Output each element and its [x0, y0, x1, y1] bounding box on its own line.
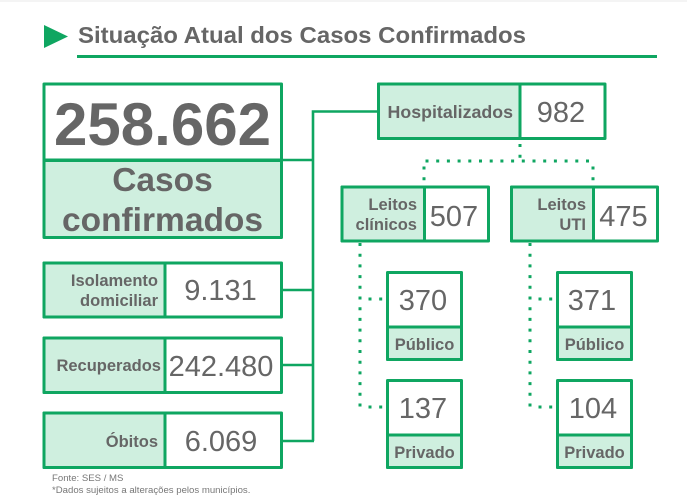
panel: UTI privado: Privado [564, 444, 625, 462]
icon: green triangle [44, 25, 68, 48]
title underline [77, 55, 657, 58]
panel: hospitalizados [378, 84, 605, 138]
total number: 258.662 [54, 91, 271, 158]
panel: clinicos privado [388, 380, 462, 468]
footnote: *Dados sujeitos a alterações pelos municípios. [52, 485, 250, 496]
title: Situação Atual dos Casos Confirmados [78, 22, 526, 48]
connector: dotted hospital branches [360, 144, 593, 408]
panel: hospitalizados: 982 [537, 97, 585, 129]
panel: leitos UTI: UTI [559, 216, 586, 234]
panel: UTI publico: Público [565, 336, 624, 354]
footnote: Fonte: SES / MS [52, 473, 123, 484]
panel: recuperados: Recuperados [56, 357, 161, 375]
panel: isolamento domiciliar: domiciliar [80, 292, 159, 310]
header [44, 22, 657, 58]
panel: obitos: Óbitos [106, 432, 158, 451]
panel: leitos clinicos: Leitos [368, 196, 417, 214]
panel: clinicos publico: Público [395, 336, 454, 354]
panel: UTI privado: 104 [569, 393, 617, 425]
panel: casos confirmados [44, 84, 282, 239]
panel: leitos clinicos: 507 [430, 201, 478, 233]
panel: UTI publico: 371 [568, 285, 616, 317]
panel: isolamento domiciliar [44, 263, 282, 317]
panel: leitos UTI: 475 [599, 201, 648, 233]
panel: casos confirmados: confirmados [62, 202, 263, 239]
panel: clinicos publico [388, 272, 462, 360]
panel: UTI privado [558, 380, 632, 468]
panel: leitos clinicos [342, 187, 488, 241]
panel: clinicos privado: 137 [399, 393, 447, 425]
panel: isolamento domiciliar: Isolamento [71, 272, 158, 290]
connector: solid tree [282, 112, 378, 441]
panel: clinicos privado: Privado [394, 444, 455, 462]
panel: obitos [44, 413, 282, 468]
panel: leitos UTI [512, 187, 658, 241]
panel: hospitalizados: Hospitalizados [388, 102, 513, 122]
panel: UTI publico [558, 272, 632, 360]
panel: isolamento domiciliar: 9.131 [184, 275, 257, 307]
panel: leitos UTI: Leitos [537, 196, 586, 214]
panel: leitos clinicos: clínicos [356, 216, 417, 234]
panel: recuperados: 242.480 [169, 351, 273, 383]
panel: recuperados [44, 338, 282, 392]
panel: clinicos publico: 370 [399, 285, 447, 317]
panel: obitos: 6.069 [185, 426, 257, 458]
footnote [52, 473, 250, 496]
label: casos confirmados: Casos [112, 162, 213, 199]
